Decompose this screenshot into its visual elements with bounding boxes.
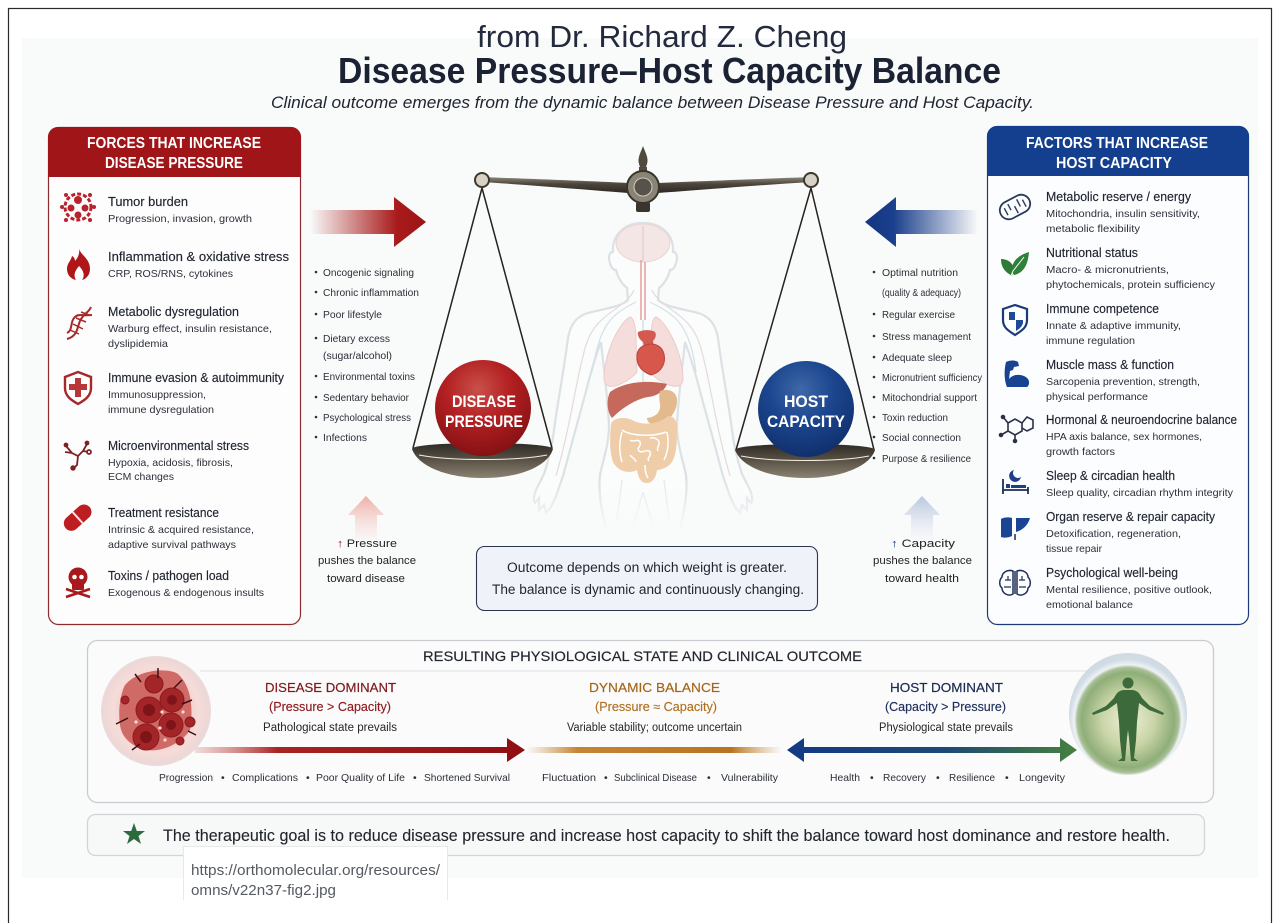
liver	[608, 382, 667, 418]
item: muscle mass: Sarcopenia prevention, strength,	[1046, 376, 1200, 388]
arrow: capacity up	[904, 496, 940, 540]
outcomes: disease dominant: Poor Quality of Life	[316, 772, 405, 784]
column: dynamic balance: (Pressure ≈ Capacity)	[595, 700, 717, 714]
item: microenvironmental stress: ECM changes	[108, 471, 174, 483]
item: psychological well-being: Mental resilience, positive outlook,	[1046, 584, 1212, 596]
left ball: disease pressure	[435, 360, 531, 456]
left pivot	[475, 173, 489, 187]
list: host capacity contributors: Regular exercise	[882, 310, 955, 321]
item: microenvironmental stress: Hypoxia, acidosis, fibrosis,	[108, 457, 233, 469]
beam	[482, 177, 811, 193]
source url tooltip	[184, 846, 448, 900]
item: immune evasion: Immunosuppression,	[108, 389, 206, 401]
right pan	[735, 444, 875, 478]
list: host capacity contributors: Adequate sleep	[882, 353, 952, 364]
list: disease pressure contributors: (sugar/alcohol)	[323, 351, 392, 362]
list: host capacity contributors: Mitochondrial support	[882, 393, 977, 404]
right ball: host capacity: HOST	[784, 392, 829, 411]
intestines	[610, 416, 677, 483]
right strings	[736, 188, 874, 450]
outcomes: dynamic balance: •	[707, 772, 711, 784]
item: inflammation	[108, 250, 289, 280]
column: dynamic balance: DYNAMIC BALANCE	[589, 680, 720, 695]
caption: capacity	[873, 538, 972, 585]
item: metabolic dysregulation: Warburg effect, insulin resistance,	[108, 323, 272, 335]
icon: hormone molecule	[1000, 416, 1033, 442]
item: metabolic reserve: Metabolic reserve / energy	[1046, 190, 1192, 204]
icon: tumor cluster circle	[102, 657, 210, 765]
item: tumor burden: Progression, invasion, growth	[108, 213, 252, 225]
icon: shield	[65, 372, 91, 404]
panel header: host capacity	[987, 126, 1249, 176]
outcomes: host dominant: •	[870, 772, 874, 784]
list: disease pressure contributors: Dietary excess	[323, 334, 390, 345]
caption: capacity: toward health	[885, 573, 959, 585]
item: nutritional status	[1046, 246, 1216, 291]
list: disease pressure contributors: Oncogenic signaling	[323, 268, 414, 279]
item: microenvironmental stress	[108, 439, 249, 483]
panel: resulting physiological state	[88, 640, 1214, 802]
column: host dominant: HOST DOMINANT	[890, 680, 1003, 695]
item: immune evasion	[108, 371, 285, 416]
stomach	[647, 390, 677, 425]
list: host capacity contributors: Purpose & resilience	[882, 454, 971, 465]
item: inflammation: Inflammation & oxidative stress	[108, 250, 289, 264]
outcomes: dynamic balance: Fluctuation	[542, 772, 596, 784]
outcomes: disease dominant	[159, 772, 510, 784]
outcomes: disease dominant: •	[221, 772, 225, 784]
item: immune evasion: immune dysregulation	[108, 404, 214, 416]
outcomes: disease dominant: Progression	[159, 772, 213, 784]
icon: pill	[61, 501, 95, 534]
title: Disease Pressure–Host Capacity Balance	[338, 50, 1001, 91]
list: host capacity contributors: Optimal nutrition	[882, 268, 958, 279]
item: nutritional status: Nutritional status	[1046, 246, 1138, 260]
list: host capacity contributors	[873, 268, 982, 465]
icon: healthy person circle	[1069, 653, 1187, 775]
item: immune competence	[1046, 302, 1181, 347]
item: sleep	[1046, 469, 1234, 499]
item: tumor burden	[108, 195, 252, 225]
item: nutritional status: Macro- & micronutrients,	[1046, 264, 1169, 276]
column: disease dominant: Pathological state prevails	[263, 722, 397, 734]
list: host capacity contributors: Toxin reduction	[882, 413, 948, 424]
panel header: disease pressure	[48, 127, 301, 177]
outcomes: host dominant: Resilience	[949, 772, 995, 784]
arrow: toward disease dominant	[195, 738, 525, 762]
outcomes: disease dominant: •	[413, 772, 417, 784]
finial	[638, 146, 648, 171]
item: metabolic dysregulation	[108, 305, 272, 350]
balance scale	[412, 146, 875, 478]
outcomes: dynamic balance	[542, 772, 779, 784]
item: inflammation: CRP, ROS/RNS, cytokines	[108, 268, 233, 280]
outcomes: disease dominant: •	[306, 772, 310, 784]
human body anatomy figure	[534, 223, 752, 530]
item: toxins: Toxins / pathogen load	[108, 569, 229, 583]
spinal cord and esophagus	[641, 260, 645, 320]
outcomes: disease dominant: Shortened Survival	[424, 772, 510, 784]
caption: capacity: ↑ Capacity	[891, 538, 956, 550]
item: hormonal balance	[1046, 413, 1237, 458]
column: dynamic balance	[567, 680, 742, 734]
icon: dna helix	[67, 307, 92, 339]
icon: leaf	[1001, 252, 1029, 278]
brain	[616, 224, 670, 262]
list: host capacity contributors: Social connection	[882, 433, 961, 444]
item: metabolic reserve: metabolic flexibility	[1046, 223, 1141, 235]
panel header: disease pressure: FORCES THAT INCREASE	[87, 135, 261, 152]
left strings	[413, 188, 552, 448]
arrow: pressure up	[348, 496, 384, 540]
heart	[638, 330, 656, 347]
outcomes: host dominant: Longevity	[1019, 772, 1066, 784]
caption: pressure: ↑ Pressure	[337, 538, 397, 550]
item: immune competence: immune regulation	[1046, 335, 1135, 347]
left pan	[412, 443, 553, 478]
item: nutritional status: phytochemicals, protein sufficiency	[1046, 279, 1216, 291]
item: psychological well-being: Psychological well-being	[1046, 566, 1178, 580]
panel header: host capacity: FACTORS THAT INCREASE	[1026, 135, 1208, 152]
item: muscle mass: Muscle mass & function	[1046, 358, 1174, 372]
column: host dominant	[879, 680, 1013, 734]
icon: mitochondrion	[997, 192, 1033, 222]
column: host dominant: Physiological state prevails	[879, 722, 1013, 734]
item: toxins	[108, 569, 264, 599]
right ball: host capacity: CAPACITY	[767, 412, 846, 431]
item: psychological well-being: emotional balance	[1046, 599, 1133, 611]
left ball: disease pressure: DISEASE	[452, 392, 516, 411]
item: treatment resistance: Intrinsic & acquired resistance,	[108, 524, 254, 536]
column: host dominant: (Capacity > Pressure)	[885, 700, 1006, 714]
list: disease pressure contributors: Poor lifestyle	[323, 310, 382, 321]
caption: pressure: toward disease	[327, 573, 405, 585]
item: microenvironmental stress: Microenvironmental stress	[108, 439, 249, 453]
outcomes: disease dominant: Complications	[232, 772, 298, 784]
callout: therapeutic goal: The therapeutic goal is to reduce disease pressure and increase host capacity to shift the balance toward host dominance and restore health.	[163, 827, 1170, 845]
outcomes: host dominant: •	[1005, 772, 1009, 784]
icon: tumor cell cluster	[60, 193, 96, 222]
bar: dynamic balance	[526, 747, 782, 753]
item: hormonal balance: growth factors	[1046, 446, 1115, 458]
column: dynamic balance: Variable stability; outcome uncertain	[567, 722, 742, 734]
panel: factors that increase host capacity	[987, 126, 1249, 624]
item: metabolic dysregulation: dyslipidemia	[108, 338, 168, 350]
icon: shield	[1003, 305, 1027, 335]
panel: forces that increase disease pressure	[48, 127, 301, 624]
caption: capacity: pushes the balance	[873, 555, 972, 567]
icon: brain	[1000, 570, 1030, 595]
outcomes: dynamic balance: •	[604, 772, 608, 784]
panel header: host capacity: HOST CAPACITY	[1056, 155, 1173, 172]
list: disease pressure contributors: Sedentary behavior	[323, 393, 410, 404]
item: immune competence: Immune competence	[1046, 302, 1159, 316]
column: disease dominant	[263, 680, 397, 734]
right ball: host capacity	[758, 361, 854, 457]
item: treatment resistance: Treatment resistance	[108, 506, 219, 520]
list: disease pressure contributors: Psychological stress	[323, 413, 411, 424]
item: hormonal balance: Hormonal & neuroendocrine balance	[1046, 413, 1237, 427]
item: organ reserve: tissue repair	[1046, 543, 1102, 555]
outcomes: host dominant: Health	[830, 772, 860, 784]
left ball: disease pressure: PRESSURE	[445, 412, 523, 431]
item: metabolic reserve	[1046, 190, 1200, 235]
arrow: blue force pushing toward scale	[865, 197, 978, 247]
icon: flexed arm	[1005, 360, 1029, 387]
icon: flame	[67, 248, 90, 280]
list: host capacity contributors: Stress management	[882, 332, 971, 343]
caption: pressure	[318, 538, 416, 585]
item: psychological well-being	[1046, 566, 1212, 611]
body outline	[534, 223, 752, 530]
item: immune evasion: Immune evasion & autoimmunity	[108, 371, 285, 385]
icon: branching molecule	[64, 442, 91, 470]
item: organ reserve: Organ reserve & repair capacity	[1046, 510, 1216, 524]
item: metabolic dysregulation: Metabolic dysregulation	[108, 305, 239, 319]
column: disease dominant: (Pressure > Capacity)	[269, 700, 391, 714]
source url tooltip: omns/v22n37-fig2.jpg	[191, 882, 336, 899]
panel header: disease pressure: DISEASE PRESSURE	[105, 155, 243, 172]
lungs	[604, 317, 637, 386]
item: muscle mass: physical performance	[1046, 391, 1148, 403]
callout: therapeutic goal	[88, 814, 1204, 856]
caption: pressure: pushes the balance	[318, 555, 416, 567]
item: organ reserve: Detoxification, regeneration,	[1046, 528, 1181, 540]
item: toxins: Exogenous & endogenous insults	[108, 587, 264, 599]
callout: outcome depends: The balance is dynamic and continuously changing.	[492, 582, 804, 597]
callout: outcome depends: Outcome depends on which weight is greater.	[507, 560, 787, 575]
outcomes: dynamic balance: Subclinical Disease	[614, 772, 697, 784]
icon: skull and crossbones	[66, 568, 90, 597]
item: sleep: Sleep & circadian health	[1046, 469, 1175, 483]
outcomes: host dominant	[830, 772, 1066, 784]
item: treatment resistance	[108, 506, 254, 551]
right pivot	[804, 173, 818, 187]
item: tumor burden: Tumor burden	[108, 195, 188, 209]
list: disease pressure contributors: Chronic inflammation	[323, 288, 419, 299]
hub	[627, 171, 659, 203]
attribution line: from Dr. Richard Z. Cheng	[477, 19, 847, 54]
source url tooltip: https://orthomolecular.org/resources/	[191, 862, 441, 879]
panel heading: RESULTING PHYSIOLOGICAL STATE AND CLINICAL OUTCOME	[423, 648, 862, 664]
item: treatment resistance: adaptive survival pathways	[108, 539, 236, 551]
outcomes: host dominant: Recovery	[883, 772, 927, 784]
item: muscle mass	[1046, 358, 1200, 403]
list: host capacity contributors: (quality & adequacy)	[882, 288, 961, 299]
list: disease pressure contributors: Infections	[323, 433, 367, 444]
icon: liver	[1001, 517, 1030, 540]
item: organ reserve	[1046, 510, 1216, 555]
list: host capacity contributors: Micronutrient sufficiency	[882, 373, 982, 384]
list: disease pressure contributors	[315, 268, 419, 444]
arrow: red force pushing toward scale	[310, 197, 426, 247]
item: metabolic reserve: Mitochondria, insulin sensitivity,	[1046, 208, 1200, 220]
outcomes: dynamic balance: Vulnerability	[721, 772, 779, 784]
icon: star	[123, 823, 145, 844]
subtitle: Clinical outcome emerges from the dynamic balance between Disease Pressure and Host Capacity.	[271, 94, 1034, 112]
arrow: host dominant double headed	[787, 738, 1077, 762]
column: disease dominant: DISEASE DOMINANT	[265, 680, 396, 695]
item: sleep: Sleep quality, circadian rhythm integrity	[1046, 487, 1234, 499]
item: hormonal balance: HPA axis balance, sex hormones,	[1046, 431, 1202, 443]
item: immune competence: Innate & adaptive immunity,	[1046, 320, 1181, 332]
icon: moon and bed	[1003, 470, 1028, 494]
list: disease pressure contributors: Environmental toxins	[323, 372, 415, 383]
outcomes: host dominant: •	[936, 772, 940, 784]
callout: outcome depends	[476, 546, 818, 610]
vessels	[556, 290, 730, 476]
